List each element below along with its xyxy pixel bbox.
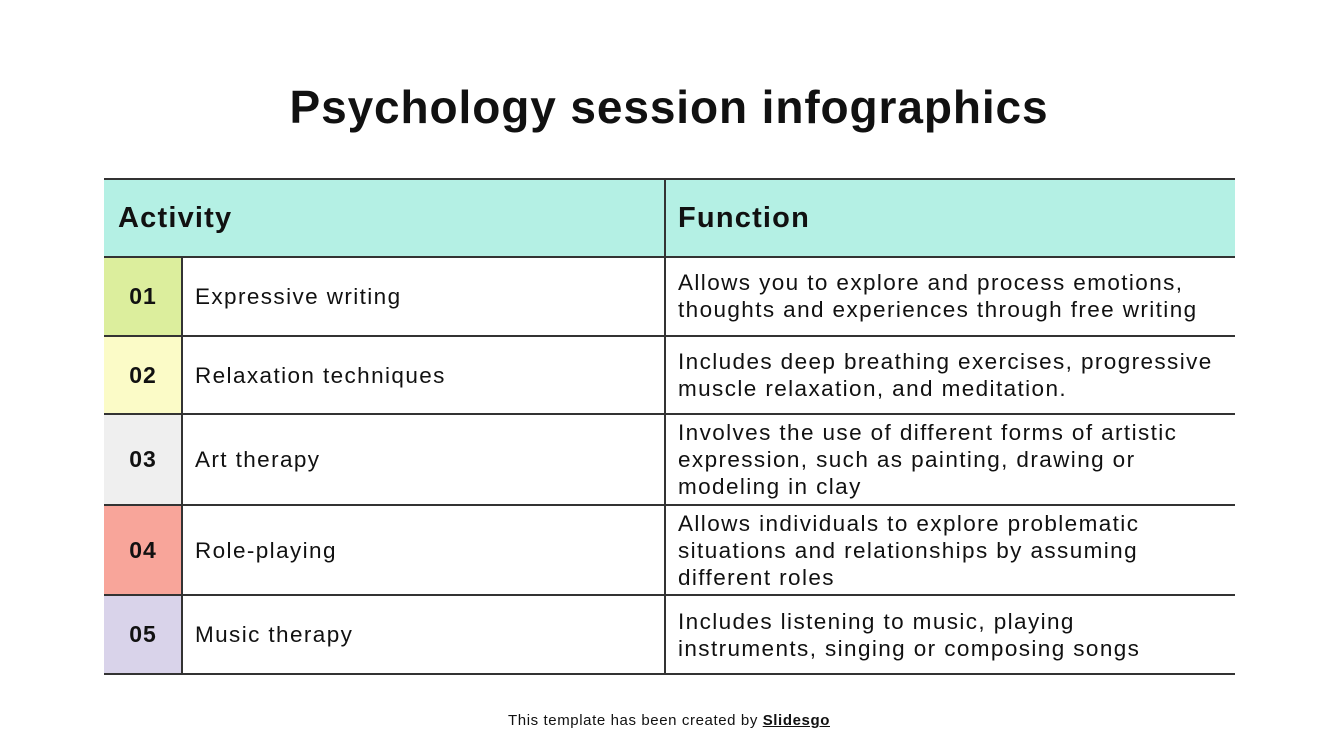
row 5 (129, 608, 1140, 660)
row 1: thoughts and experiences through free writing (678, 297, 1198, 322)
row 3: Involves the use of different forms of artistic (678, 420, 1177, 445)
row 2 (129, 349, 1213, 401)
row 4: different roles (678, 564, 835, 590)
row 2: Includes deep breathing exercises, progressive (678, 349, 1213, 374)
row 3: modeling in clay (678, 474, 862, 499)
row 5: Includes listening to music, playing (678, 608, 1075, 634)
row 4: Allows individuals to explore problematic (678, 510, 1139, 536)
row 3: 03 (129, 446, 157, 472)
row 3: Art therapy (195, 447, 320, 472)
footer credit: This template has been created by Slidesgo (508, 712, 830, 729)
row 5: Music therapy (195, 622, 353, 647)
row 2: 02 (129, 362, 157, 388)
row 4: Role-playing (195, 538, 337, 562)
row 3 (129, 420, 1177, 499)
row 2: muscle relaxation, and meditation. (678, 376, 1067, 401)
title: Psychology session infographics (290, 81, 1048, 133)
row 4: situations and relationships by assuming (678, 538, 1138, 562)
number cell colors (104, 258, 181, 673)
row 1: Allows you to explore and process emotions, (678, 270, 1183, 295)
row 1: Expressive writing (195, 284, 402, 308)
header: Function: Function (678, 202, 810, 234)
row 1: 01 (129, 282, 157, 308)
row 3: expression, such as painting, drawing or (678, 447, 1135, 472)
header: Activity: Activity (118, 202, 232, 234)
row 5: 05 (129, 621, 157, 647)
row 2: Relaxation techniques (195, 362, 446, 388)
row 4: 04 (129, 536, 157, 562)
header row (104, 178, 1235, 257)
table (104, 178, 1235, 675)
row 4 (129, 510, 1139, 590)
row 5: instruments, singing or composing songs (678, 636, 1140, 660)
row 1 (129, 270, 1198, 322)
